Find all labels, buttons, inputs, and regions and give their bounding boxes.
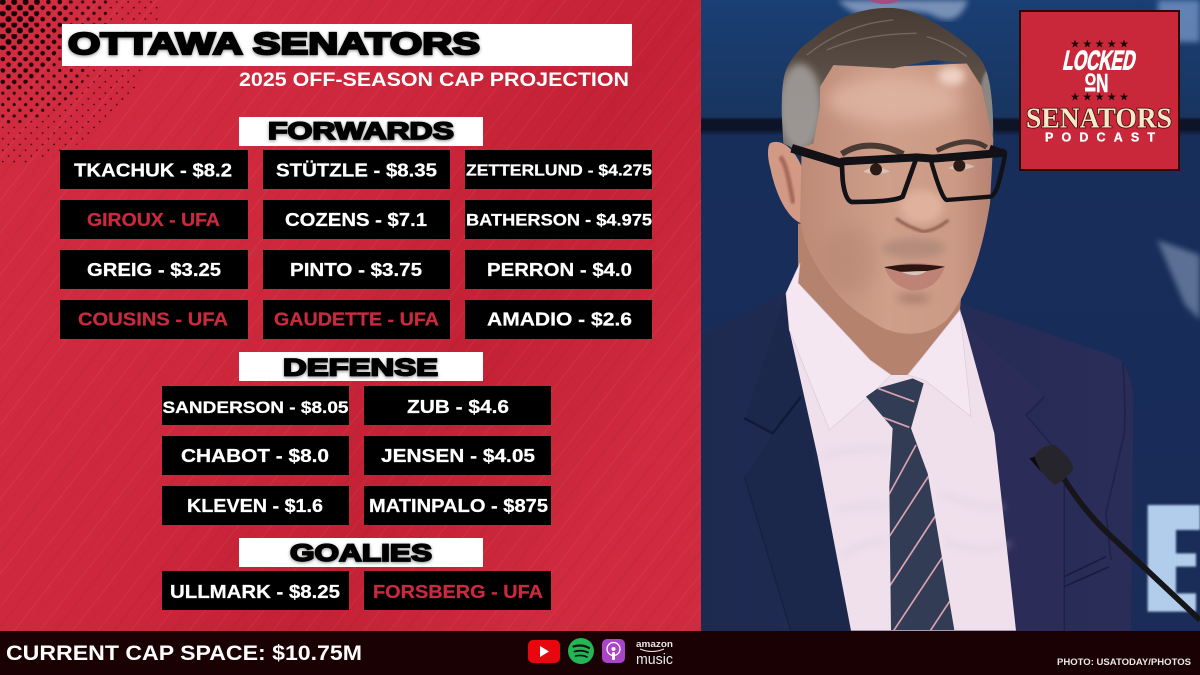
on wordmark: N [1096,68,1108,98]
player: Giroux: GIROUX - UFA [87,210,220,230]
nose [900,190,943,223]
player: Greig: GREIG - $3.25 [87,260,221,280]
title banner: OTTAWA SENATORS [68,26,480,61]
panel: red background [0,0,701,631]
brows [842,146,903,154]
player: Matinpalo: MATINPALO - $875 [369,496,548,516]
player: Kleven [162,486,349,525]
player: Jensen: JENSEN - $4.05 [381,446,535,466]
collar [786,263,891,430]
panel: goalies roster [162,571,551,610]
on wordmark: O [1085,70,1096,89]
player: Tkachuk [60,150,248,189]
player: Forsberg [364,571,551,610]
cap space text: CURRENT CAP SPACE: $10.75M [6,642,362,665]
subtitle: 2025 OFF-SEASON CAP PROJECTION [239,70,629,91]
panel: defense roster [162,386,551,525]
player: Chabot: CHABOT - $8.0 [181,446,329,466]
ear [768,142,802,223]
eyes [864,168,890,174]
player: Zub [364,386,551,425]
player: Chabot [162,436,349,475]
player: Amadio [465,300,652,339]
player: Tkachuk: TKACHUK - $8.2 [74,160,232,180]
player: Perron [465,250,652,289]
mouth [885,263,945,291]
player: Ullmark [162,571,349,610]
tie [866,378,954,630]
player: Ullmark: ULLMARK - $8.25 [170,582,340,602]
player: Jensen [364,436,551,475]
icon: Amazon Music: amazon [636,639,673,650]
heading: defense [239,352,483,382]
microphone stem [1063,477,1200,620]
locked wordmark: LOCKED [1061,45,1139,75]
player: Cousins: COUSINS - UFA [78,310,228,330]
player: Sanderson [162,386,349,425]
player: Forsberg: FORSBERG - UFA [373,582,543,602]
photo: general manager at press conference [701,0,1200,633]
logo: Locked On Senators podcast [1020,11,1179,170]
player: Cousins [60,300,248,339]
hair [782,8,994,148]
player: Cozens: COZENS - $7.1 [285,210,427,230]
face [800,63,993,334]
icon: Apple Podcasts [602,639,625,663]
photo credit: PHOTO: USATODAY/PHOTOS [1057,657,1191,668]
player: Pinto [263,250,450,289]
heading: forwards: FORWARDS [268,118,454,145]
player: Sanderson: SANDERSON - $8.05 [162,398,348,417]
player: Giroux [60,200,248,239]
player: Stutzle: STÜTZLE - $8.35 [276,160,437,180]
lower stars: ★★★★★ [1070,90,1129,104]
shirt [789,310,1016,631]
panel: forwards roster [60,150,652,339]
player: Amadio: AMADIO - $2.6 [487,310,632,330]
player: Perron: PERRON - $4.0 [487,260,632,280]
player: Zub: ZUB - $4.6 [407,397,509,417]
icon: Amazon Music [636,639,673,668]
neck [798,223,964,375]
player: Kleven: KLEVEN - $1.6 [187,496,323,516]
player: Zetterlund [465,150,652,189]
player: Gaudette: GAUDETTE - UFA [274,310,439,330]
podcast wordmark: PODCAST [1045,130,1155,144]
icon: Spotify [568,638,594,664]
suit, shirt, tie and microphone (lower body) [701,223,1200,633]
icon: YouTube [528,640,560,663]
stars: ★★★★★ [1070,38,1129,50]
heading: defense: DEFENSE [283,354,438,382]
player: Zetterlund: ZETTERLUND - $4.275 [466,162,652,180]
player: Gaudette [263,300,450,339]
player: Matinpalo [364,486,551,525]
player: Pinto: PINTO - $3.75 [290,260,422,280]
heading: goalies [239,538,483,567]
bottom bar [0,631,1200,675]
senators wordmark: SENATORS [1026,102,1172,134]
glasses [792,147,1006,202]
player: Batherson [465,200,652,239]
heading: goalies: GOALIES [290,540,432,567]
underline bar [1085,88,1096,92]
heading: forwards [239,117,483,146]
head: hair, face, glasses [768,3,1006,334]
player: Batherson: BATHERSON - $4.975 [466,212,652,230]
title banner [62,24,632,66]
player: Greig [60,250,248,289]
player: Cozens [263,200,450,239]
player: Stutzle [263,150,450,189]
icon: Amazon Music: music [636,651,673,668]
